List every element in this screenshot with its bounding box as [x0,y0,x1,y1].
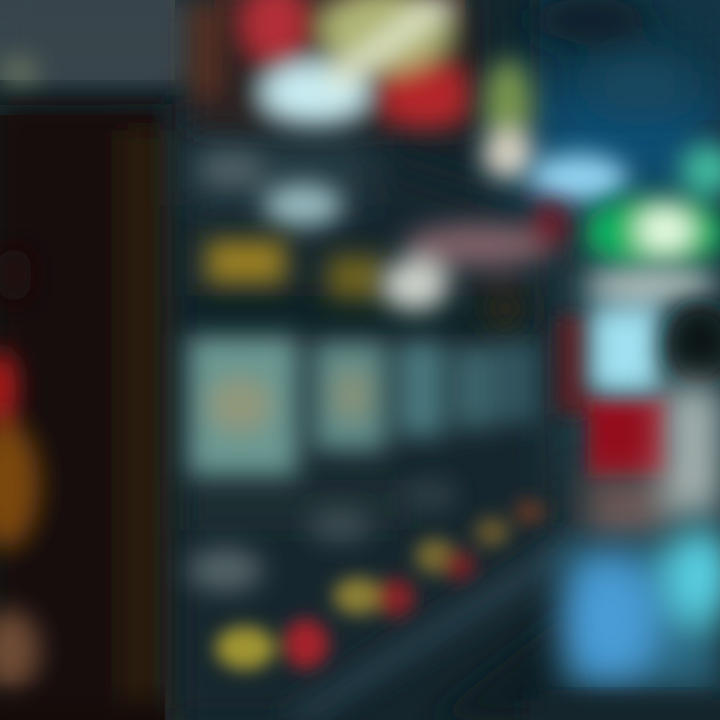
left dark cabinet [0,105,172,720]
bottom right dark band [530,698,720,720]
machine ledge [275,538,578,720]
lower panel highlights [187,480,456,592]
left cabinet bottom edge shade [0,680,165,720]
white and red highlights [381,201,570,336]
dark figure [666,303,720,387]
left edge lights [0,247,40,690]
right bottom edge shade [530,690,720,720]
machine buttons [215,499,546,670]
pale figure body [585,385,720,540]
top panel highlights [198,153,343,227]
machine screens [188,336,538,476]
bottom dark floor [430,610,600,720]
top-right blue area [520,0,720,490]
yellow-green column light [482,59,534,179]
upper right dark patches [528,0,692,109]
top circular sign [190,0,475,130]
blue glow [528,154,628,202]
right pale blue panel [584,268,716,392]
lower right floor reflections [560,525,720,690]
right red block [556,316,670,478]
machine bank body [175,100,570,720]
yellow header lights [206,240,382,298]
top-left grey wall [0,0,195,90]
green glow [583,144,720,268]
